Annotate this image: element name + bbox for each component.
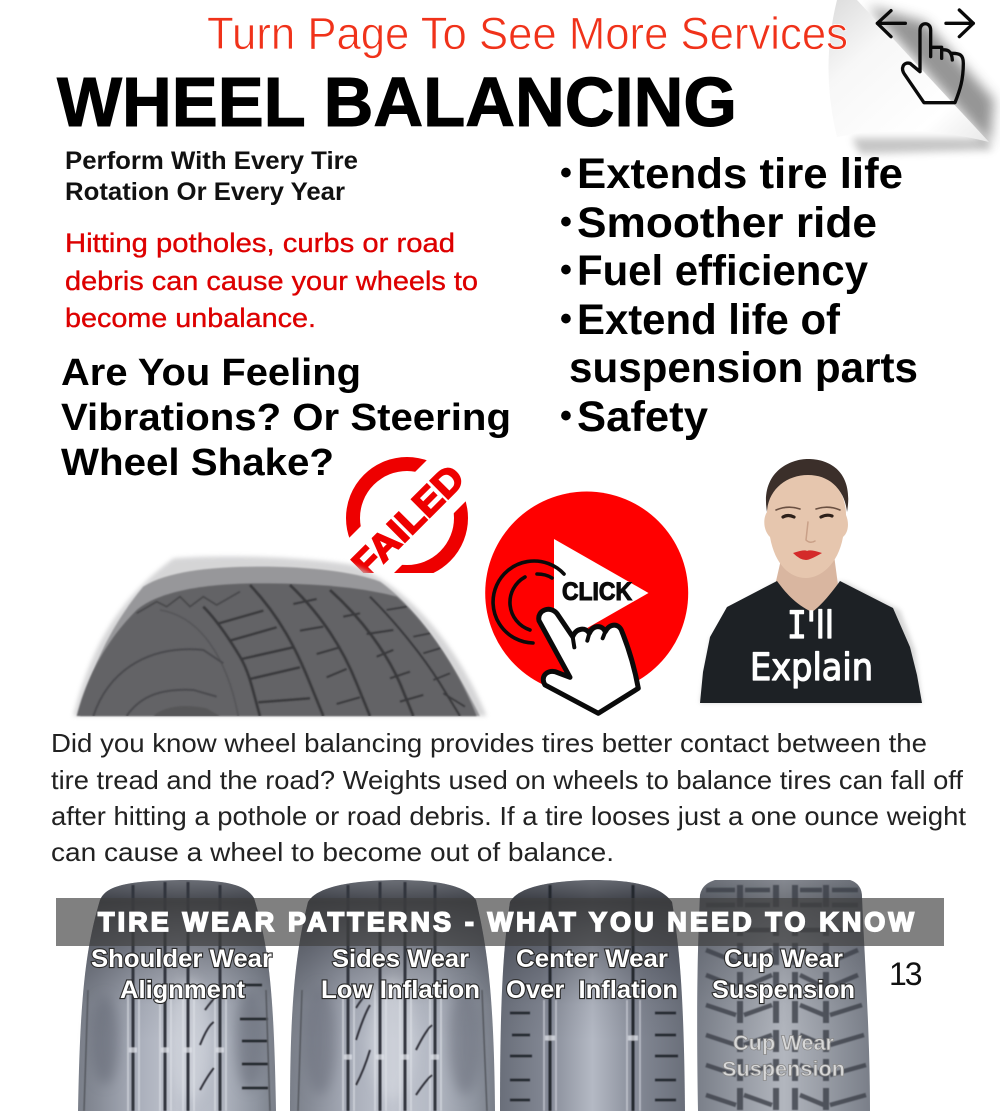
red warning text: become unbalance. [65,303,316,333]
benefits list: Smoother ride [577,199,877,247]
tire labels: Over Inflation [506,976,678,1004]
shirt text: Explain [750,646,873,689]
pointing hand [539,609,638,713]
shirt text: I'll [787,604,834,647]
page number: 13 [889,956,922,992]
red warning text: Hitting potholes, curbs or road [65,228,455,258]
tire tread [93,585,465,716]
tire labels: Suspension [712,976,855,1004]
faded tire caption: Suspension [722,1058,845,1081]
banner [56,898,944,946]
explanatory paragraph [51,728,967,867]
tire: center wear [500,880,685,1111]
tire labels: Low Inflation [321,976,480,1004]
hair [766,459,848,512]
tire: cup wear [697,880,870,1111]
benefits list: Fuel efficiency [577,247,868,295]
explanatory paragraph: after hitting a pothole or road debris. If a tire looses just a one ounce weight [51,801,967,831]
shirt text [750,604,873,689]
eyebrows and eyes [776,507,840,542]
red warning text: debris can cause your wheels to [65,266,478,296]
play triangle [554,539,648,647]
curl shadow [852,138,992,154]
service interval: Rotation Or Every Year [65,178,345,206]
benefits list: Safety [577,393,708,441]
play button click icon [485,492,688,713]
benefits list: • [560,203,572,241]
service interval [65,147,358,206]
benefits list: • [560,251,572,289]
tire labels: Alignment [120,976,246,1004]
faded tire caption: Cup Wear [733,1032,834,1055]
swipe hand [877,10,973,103]
benefits list [560,150,918,441]
benefits list: Extends tire life [577,150,903,198]
symptom question [61,352,511,484]
top notice: Turn Page To See More Services [207,8,848,59]
benefits list: • [560,154,572,192]
tire: sides wear [290,880,495,1111]
sweater [700,581,922,703]
service interval: Perform With Every Tire [65,147,358,175]
play button circle [485,492,688,694]
tire labels [91,945,855,1004]
benefits list: Extend life of [577,296,841,344]
unbalanced tire [73,556,487,716]
click ripples [493,561,564,643]
benefits list: • [560,300,572,338]
page curl icon [828,0,994,154]
presenter [700,459,922,703]
neck [774,555,842,618]
wear mottling [91,980,264,1100]
curled page [828,0,989,142]
symptom question: Wheel Shake? [61,442,334,484]
lips [793,550,822,560]
tire labels: Cup Wear [724,945,843,973]
red warning text [65,228,478,333]
title: WHEEL BALANCING [57,63,737,141]
tire labels: Center Wear [516,945,668,973]
tire labels: Shoulder Wear [91,945,272,973]
symptom question: Vibrations? Or Steering [61,397,511,439]
explanatory paragraph: can cause a wheel to become out of balance. [51,837,614,867]
click label: CLICK [562,578,632,606]
explanatory paragraph: Did you know wheel balancing provides tires better contact between the [51,728,927,758]
banner heading: TIRE WEAR PATTERNS - WHAT YOU NEED TO KNOW [98,907,917,937]
tire body [77,583,477,716]
benefits list: suspension parts [569,344,918,392]
symptom question: Are You Feeling [61,352,361,394]
face [764,475,848,578]
failed stamp: FAILED [344,457,472,585]
explanatory paragraph: tire tread and the road? Weights used on wheels to balance tires can fall off [51,765,964,795]
faded tire caption [722,1032,845,1081]
wear mottling [304,980,481,1100]
benefits list: • [560,397,572,435]
tire labels: Sides Wear [332,945,469,973]
tire: shoulder wear [78,880,276,1111]
tire ghost outline [73,556,487,716]
presenter shadow [700,582,922,703]
